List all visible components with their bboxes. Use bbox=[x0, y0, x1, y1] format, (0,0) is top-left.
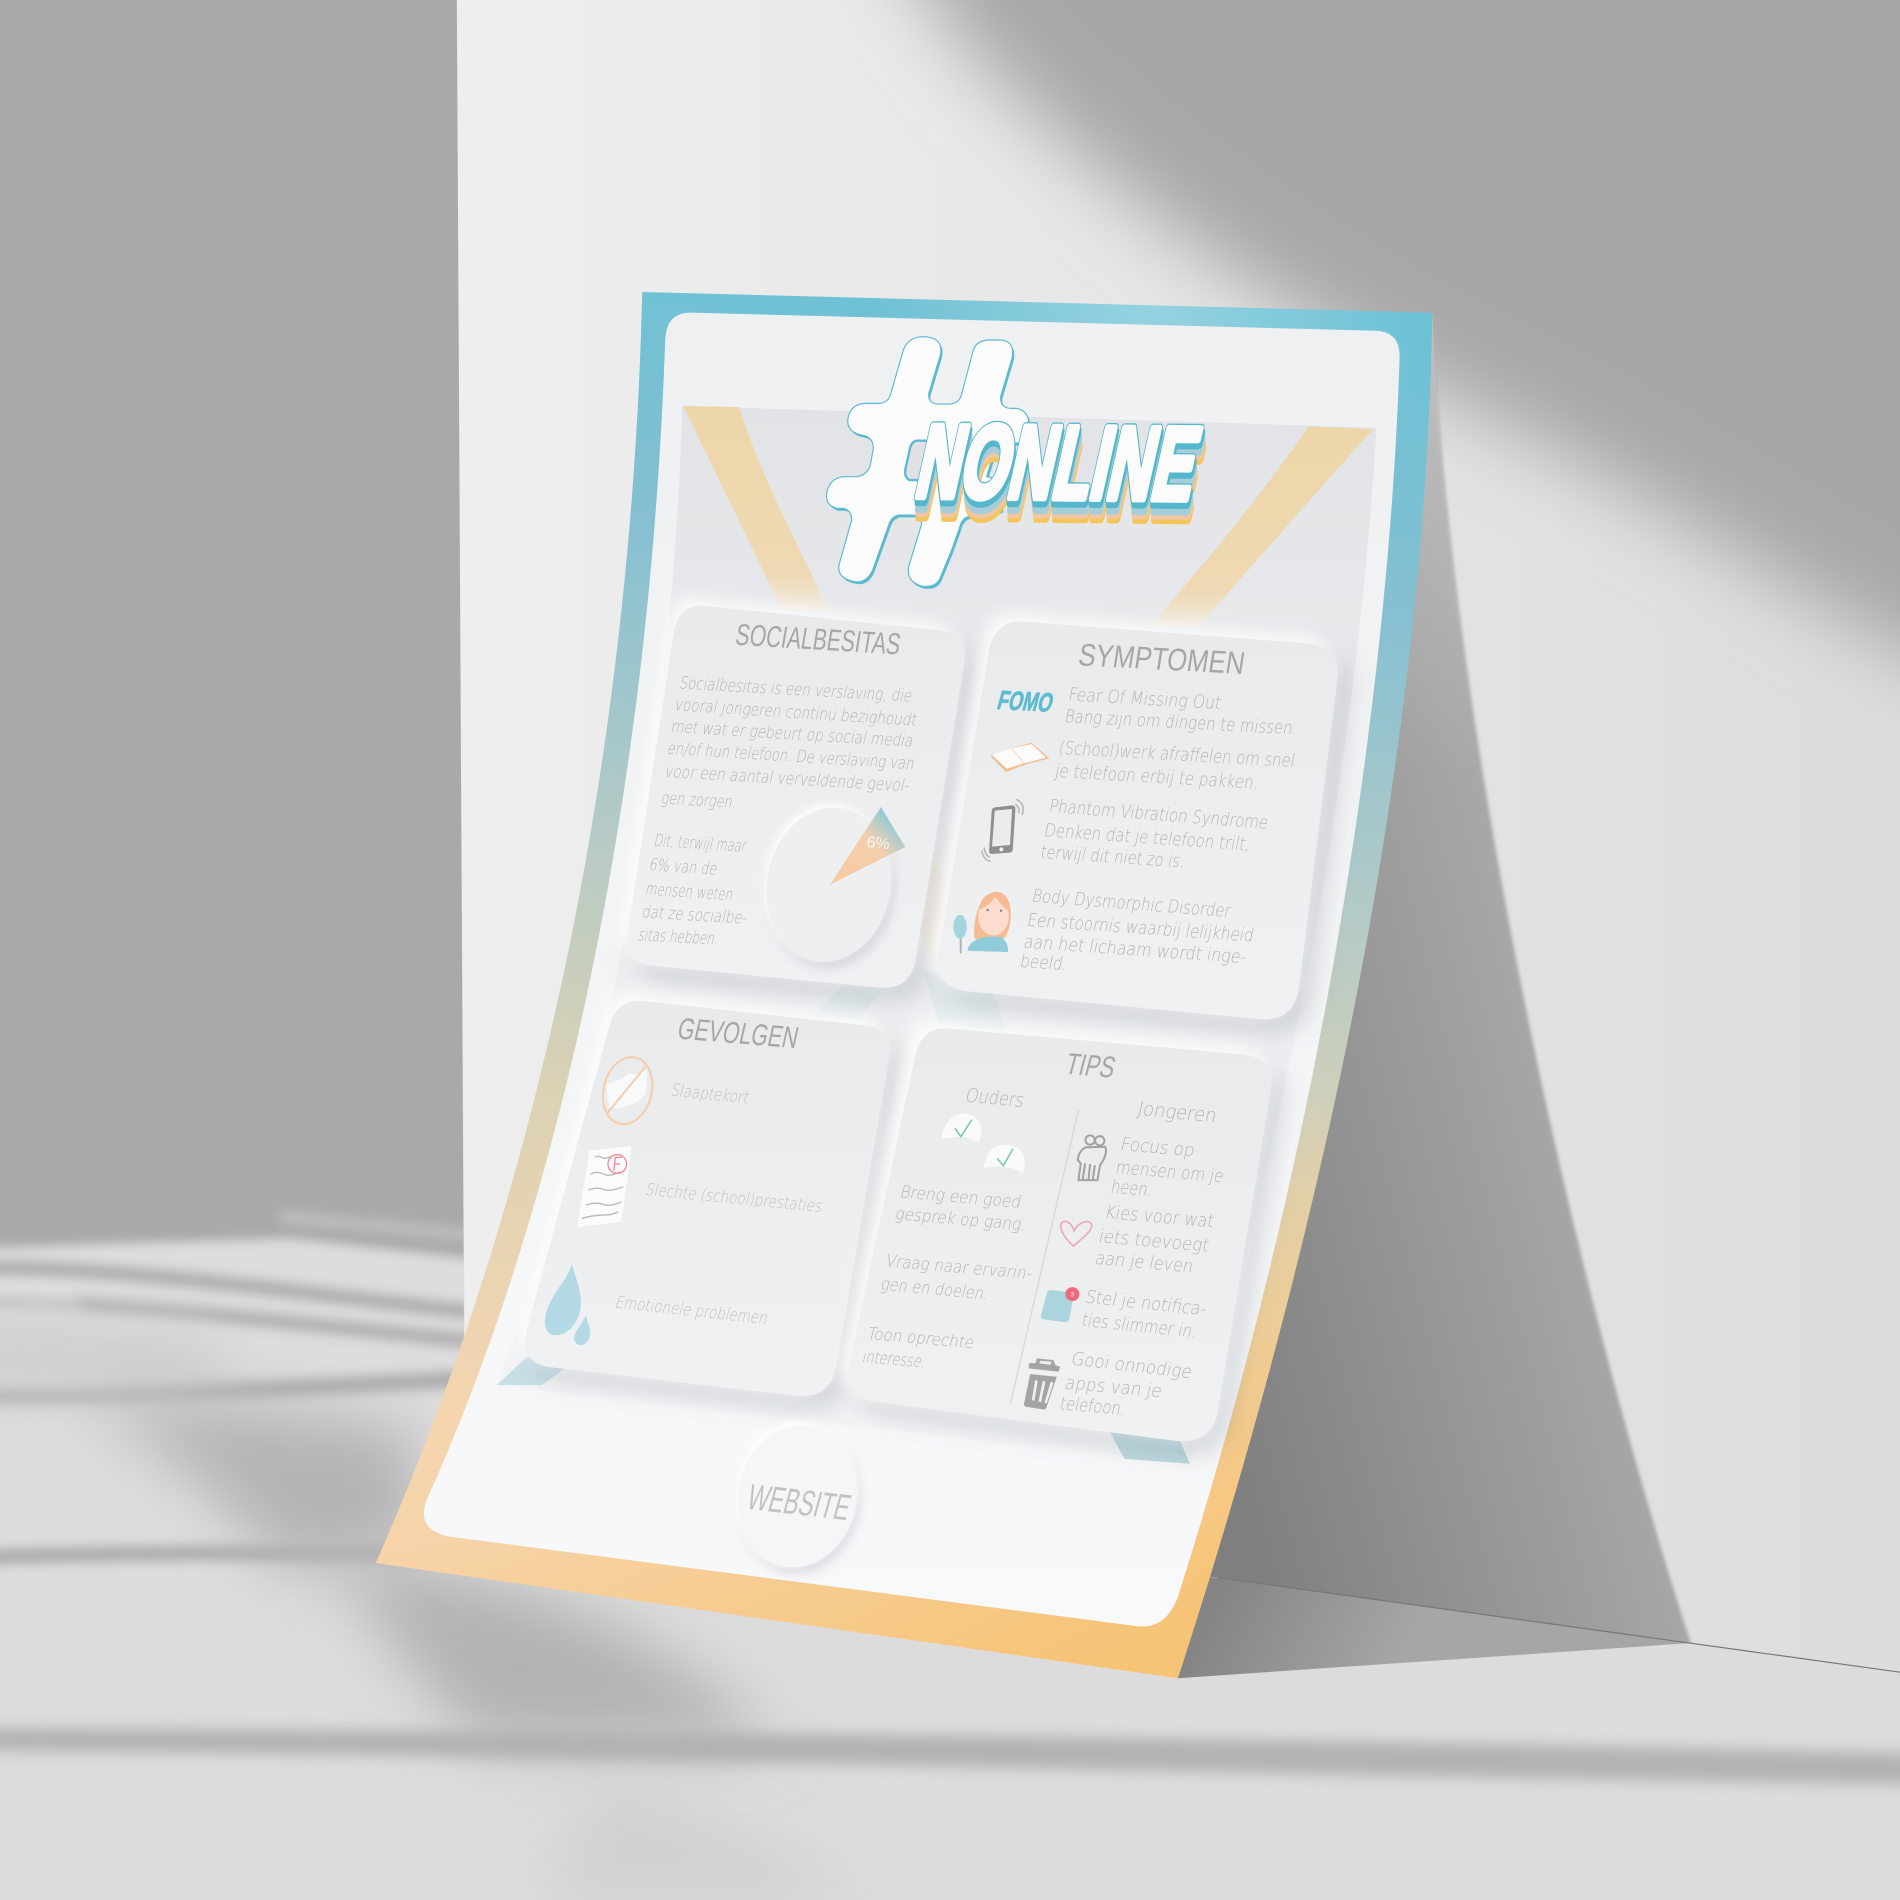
awareness text: mensen weten bbox=[643, 880, 735, 905]
emotional problems item bbox=[545, 1264, 770, 1345]
phantom vibration item: Phantom Vibration Syndrome bbox=[1047, 796, 1270, 834]
pie chart: 6 percent: 6% bbox=[866, 834, 890, 853]
sleep deficit item bbox=[596, 1052, 751, 1129]
body text: en/of hun telefoon. De verslaving van bbox=[665, 739, 917, 774]
peach band middle bbox=[911, 848, 957, 969]
icon: crossed-out pillow bbox=[596, 1052, 659, 1129]
teal band middle right bbox=[923, 969, 1006, 1030]
decorative tan band right bbox=[1149, 427, 1373, 628]
poster sheet with gradient border bbox=[376, 292, 1432, 1678]
column: jongeren: apps van je bbox=[1063, 1373, 1164, 1402]
heading: TIPS bbox=[1062, 1047, 1119, 1085]
FOMO item bbox=[994, 685, 1299, 739]
column: jongeren: mensen om je bbox=[1114, 1157, 1226, 1187]
NONLINE wordmark: NONLINE bbox=[908, 409, 1211, 527]
website button: WEBSITE bbox=[743, 1477, 855, 1528]
body text bbox=[659, 674, 919, 813]
column: jongeren: Gooi onnodige bbox=[1069, 1349, 1194, 1383]
icon: woman with mirror bbox=[953, 892, 1011, 953]
phantom vibration item: Denken dat je telefoon trilt, bbox=[1042, 820, 1252, 855]
column: jongeren: heen. bbox=[1109, 1177, 1155, 1201]
poster shadow on wall and floor bbox=[1151, 313, 1900, 1678]
FOMO item: Fear Of Missing Out bbox=[1067, 685, 1223, 714]
NONLINE wordmark: NONLINE bbox=[909, 420, 1211, 538]
column: ouders: Breng een goed bbox=[898, 1183, 1024, 1213]
body text: Socialbesitas is een verslaving, die bbox=[677, 674, 914, 707]
body dysmorphic item: Body Dysmorphic Disorder bbox=[1030, 886, 1233, 922]
teal band middle bbox=[814, 979, 887, 1018]
emotional problems item: Emotionele problemen bbox=[613, 1293, 770, 1329]
icon: failed test paper bbox=[577, 1146, 632, 1227]
icon: notification: 3 bbox=[1070, 1292, 1074, 1299]
grey backdrop bbox=[497, 406, 1377, 1464]
icon: speech bubbles with checks bbox=[942, 1114, 1025, 1173]
heading: SYMPTOMEN bbox=[1076, 637, 1248, 681]
FOMO item: Bang zijn om dingen te missen. bbox=[1063, 706, 1299, 739]
column: jongeren: Stel je notifica- bbox=[1083, 1287, 1209, 1320]
column: jongeren: ties slimmer in. bbox=[1080, 1310, 1199, 1343]
icon: vibrating phone bbox=[982, 799, 1023, 861]
column: jongeren: iets toevoegt bbox=[1097, 1226, 1211, 1257]
body text: met wat er gebeurt op social media bbox=[669, 717, 916, 752]
column: ouders: Ouders bbox=[963, 1084, 1027, 1112]
awareness text: sitas hebben. bbox=[636, 926, 721, 949]
body text: voor een aantal verveldende gevol- bbox=[663, 762, 912, 796]
heading: GEVOLGEN bbox=[675, 1012, 802, 1055]
heading: SOCIALBESITAS bbox=[733, 619, 903, 661]
panel: symptomen bbox=[938, 621, 1338, 1019]
body dysmorphic item: Een stoornis waarbij lelijkheid bbox=[1025, 910, 1256, 946]
panel: socialbesitas bbox=[627, 606, 965, 988]
column: ouders bbox=[860, 1084, 1035, 1372]
school results item: Slechte (school)prestaties bbox=[643, 1180, 825, 1217]
icon: open book bbox=[990, 743, 1049, 772]
icon: trash can bbox=[1024, 1358, 1060, 1410]
column: jongeren: Kies voor wat bbox=[1103, 1202, 1216, 1232]
website button bbox=[724, 1414, 870, 1579]
sleep deficit item: Slaaptekort bbox=[669, 1081, 751, 1108]
NONLINE wordmark: NONLINE bbox=[908, 404, 1210, 522]
column: ouders: gen en doelen. bbox=[878, 1275, 991, 1304]
body dysmorphic item: aan het lichaam wordt inge- bbox=[1022, 932, 1248, 968]
column: ouders: interesse. bbox=[860, 1347, 928, 1372]
phantom vibration item: terwijl dit niet zo is. bbox=[1039, 842, 1187, 872]
hashtag symbol bbox=[826, 337, 1030, 589]
teal band left bottom bbox=[497, 1351, 567, 1385]
homework item with book icon bbox=[990, 738, 1297, 794]
panel: tips bbox=[848, 1028, 1271, 1441]
awareness text: Dit, terwijl maar bbox=[652, 831, 749, 857]
column: jongeren: Jongeren bbox=[1135, 1097, 1219, 1127]
NONLINE wordmark bbox=[908, 404, 1212, 542]
column: ouders: gesprek op gang. bbox=[893, 1204, 1029, 1235]
NONLINE wordmark: NONLINE bbox=[908, 404, 1210, 522]
body text: vooral jongeren continu bezighoudt bbox=[673, 695, 919, 731]
awareness text: 6% van de bbox=[647, 855, 720, 880]
homework item with book icon: (School)werk afraffelen om snel bbox=[1057, 738, 1297, 772]
column: ouders: Vraag naar ervarin- bbox=[883, 1252, 1035, 1284]
panel: gevolgen bbox=[525, 1001, 890, 1396]
icon: tear drops bbox=[545, 1264, 590, 1345]
icon: heart bbox=[1061, 1221, 1092, 1246]
title: #NONLINE logo bbox=[826, 337, 1212, 589]
NONLINE wordmark: NONLINE bbox=[909, 415, 1211, 534]
homework item with book icon: je telefoon erbij te pakken. bbox=[1052, 761, 1261, 794]
phantom vibration item bbox=[982, 796, 1270, 872]
column: jongeren: telefoon. bbox=[1058, 1394, 1128, 1420]
body dysmorphic item: beeld. bbox=[1018, 951, 1070, 975]
column: jongeren: Focus op bbox=[1119, 1134, 1197, 1161]
icon: notification bbox=[1041, 1287, 1079, 1322]
white inner panel bbox=[424, 313, 1400, 1627]
column: ouders: Toon oprechte bbox=[865, 1324, 977, 1353]
school results item bbox=[577, 1146, 825, 1227]
column: jongeren bbox=[1024, 1097, 1226, 1420]
body dysmorphic item bbox=[953, 886, 1256, 975]
divider bbox=[1011, 1110, 1078, 1403]
FOMO item: FOMO bbox=[994, 685, 1057, 718]
wall and floor junction line bbox=[1218, 1578, 1900, 1672]
awareness text: dat ze socialbe- bbox=[640, 903, 750, 929]
pie chart: 6 percent bbox=[755, 797, 905, 972]
icon: people bbox=[1078, 1135, 1106, 1180]
teal band right bottom bbox=[1109, 1430, 1190, 1464]
column: jongeren: aan je leven. bbox=[1093, 1248, 1200, 1278]
NONLINE wordmark: NONLINE bbox=[909, 424, 1212, 542]
body text: gen zorgen. bbox=[659, 789, 739, 813]
decorative tan band left bbox=[683, 406, 829, 612]
awareness text bbox=[636, 831, 750, 949]
